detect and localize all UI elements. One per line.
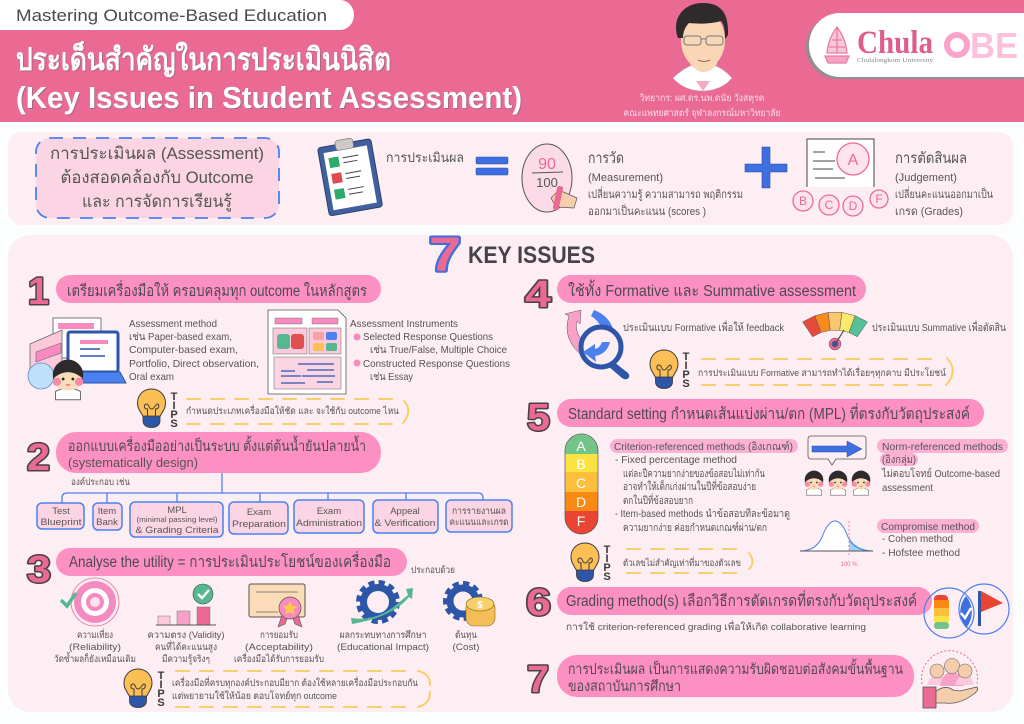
OBE wordmark	[947, 25, 1018, 66]
callout: assessment alignment: ต้องสอดคล้องกับ Outcome	[60, 168, 254, 187]
icon: paper, laptop and student	[28, 318, 126, 400]
text: criterion-referenced methods: - Item-based methods นำข้อสอบทีละข้อมาดู	[615, 507, 790, 520]
text: reliability: ความเที่ยง	[77, 628, 113, 641]
icon: grade card: C	[825, 198, 834, 212]
speaker caption: วิทยากร: ผศ.ดร.นพ.ดนัย วังสตุรค	[639, 93, 764, 104]
number 2: 2	[27, 437, 50, 479]
tips 3: T	[158, 670, 165, 682]
section 2 heading pill	[56, 432, 381, 473]
text: acceptability: (Acceptability)	[245, 642, 313, 653]
text: collaborative learning: การใช้ criterion-referenced grading เพื่อให้เกิด collaborative learning	[566, 620, 866, 633]
tips 3: S	[157, 697, 165, 709]
icon: gear with arrow	[351, 583, 413, 624]
text: assessment method	[129, 318, 259, 383]
icon: clipboard checklist	[317, 135, 383, 216]
tips 5: S	[603, 571, 611, 583]
icon: grade card: D	[849, 199, 858, 213]
text: assessment method: Oral exam	[129, 371, 174, 383]
panel: key issues background	[8, 235, 1013, 712]
icon: grade bar: F	[577, 513, 585, 529]
tips 3: I	[159, 679, 163, 691]
box: exam preparation	[229, 502, 288, 534]
section 1: prepare instruments	[28, 271, 510, 430]
number 6: 6	[526, 582, 551, 624]
icon: bell curve	[800, 521, 873, 568]
text: norm-referenced methods: Norm-referenced methods	[882, 441, 1003, 453]
text: criterion-referenced methods: ความยากง่าย ค่อยกำหนดเกณฑ์ผ่าน/ตก	[623, 521, 767, 534]
box: MPL	[130, 502, 223, 537]
header band	[0, 0, 1024, 122]
icon: exam paper	[268, 310, 346, 394]
icon: grade bar: B	[576, 456, 586, 472]
text: cost: (Cost)	[452, 642, 480, 653]
box: item bank: Item	[98, 506, 116, 517]
text: compromise method: - Cohen method	[882, 533, 953, 545]
box: MPL: MPL	[167, 505, 187, 516]
tips 4: P	[682, 369, 690, 381]
label: consists of: ประกอบด้วย	[411, 565, 455, 576]
box: appeal and verification	[373, 500, 438, 533]
tips 3: P	[157, 688, 165, 700]
text: measurement: ออกมาเป็นคะแนน (scores )	[588, 204, 706, 218]
tips 1: T	[171, 391, 178, 403]
text: validity: ความตรง (Validity)	[148, 630, 224, 641]
icon: grade card	[793, 139, 888, 216]
icon: grade card: B	[799, 194, 807, 208]
section 6 heading pill: Grading method(s) เลือกวิธีการตัดเกรดที่ตรงกับวัตถุประสงค์	[566, 590, 917, 611]
icon: magnifier with cycle arrows	[565, 310, 629, 379]
text: measurement: การวัด	[588, 150, 624, 167]
section 5 heading pill: Standard setting กำหนดเส้นแบ่งผ่าน/ตก (MPL) ที่ตรงกับวัตถุประสงค์	[568, 403, 970, 424]
tips 4	[650, 350, 953, 390]
section 7: social accountability	[527, 651, 978, 708]
series tag pill	[0, 0, 354, 30]
section 4 heading pill	[557, 275, 866, 303]
heading: 7 key issues: 7	[429, 229, 461, 282]
label: components: องค์ประกอบ เช่น	[71, 476, 130, 488]
number 3: 3	[27, 549, 51, 591]
text: formative: ประเมินแบบ Formative เพื่อให้ feedback	[623, 320, 785, 334]
text: educational impact: ผลกระทบทางการศึกษา	[340, 630, 426, 641]
tips 4: การประเมินแบบ Formative สามารถทำได้เรื่อยๆทุกคาบ มีประโยชน์	[698, 366, 946, 379]
heading: 7 key issues	[429, 229, 595, 282]
section 1 heading pill	[56, 275, 381, 303]
text: compromise method: - Hofstee method	[882, 547, 960, 559]
text: cost: ต้นทุน	[455, 630, 477, 641]
callout: assessment alignment	[36, 138, 279, 218]
icon: score paper	[522, 144, 577, 212]
box: exam preparation: Exam	[247, 507, 271, 518]
icon: grade bar	[565, 434, 598, 534]
tips 5: ตัวเลขไม่สำคัญเท่าที่มาของตัวเลข	[623, 556, 741, 569]
icon: grade bar: D	[576, 494, 586, 510]
Chula wordmark: Chula	[857, 25, 933, 61]
section 2 heading pill: (systematically design)	[68, 455, 198, 470]
tips 5: T	[604, 544, 611, 556]
speaker caption	[624, 93, 780, 119]
text: judgement: เกรด (Grades)	[895, 206, 963, 218]
text: assessment method: Portfolio, Direct observation,	[129, 358, 259, 370]
OBE wordmark: BE	[970, 25, 1018, 66]
icon: grade bar: A	[576, 438, 586, 454]
text: measurement: (Measurement)	[588, 172, 663, 184]
text: assessment method: Assessment method	[129, 318, 217, 330]
text: acceptability	[234, 630, 324, 665]
text: compromise method: Compromise method	[881, 521, 975, 533]
icon: grade card: F	[875, 192, 883, 206]
tips 4: T	[683, 351, 690, 363]
text: criterion-referenced methods: แต่ละปีความยากง่ายของข้อสอบไม่เท่ากัน	[623, 467, 765, 480]
callout: assessment alignment: และ การจัดการเรียนรู้	[82, 192, 232, 212]
text: acceptability: การยอมรับ	[260, 630, 298, 641]
box: appeal and verification: & Verification	[374, 518, 436, 529]
tips 1	[138, 389, 408, 430]
text: assessment instruments: Selected Response Questions	[363, 331, 493, 343]
text: norm-referenced methods: ไม่ตอบโจทย์ Outcome-based	[881, 467, 1000, 480]
section 5 heading pill	[557, 399, 984, 427]
box: score and grade report: การรายงานผล	[452, 506, 506, 517]
panel: definition of assessment	[8, 132, 1013, 225]
speaker caption: คณะแพทยศาสตร์ จุฬาลงกรณ์มหาวิทยาลัย	[624, 107, 780, 119]
box: exam administration: Exam	[317, 506, 341, 517]
heading: 7 key issues: KEY ISSUES	[468, 242, 595, 269]
text: judgement: เปลี่ยนคะแนนออกมาเป็น	[895, 186, 993, 201]
section 2 heading pill: ออกแบบเครื่องมืออย่างเป็นระบบ ตั้งแต่ต้นน้ำยันปลายน้ำ	[68, 435, 366, 455]
text: validity: คนที่ได้คะแนนสูง	[155, 640, 217, 653]
tips 5: P	[603, 562, 611, 574]
callout: assessment alignment: การประเมินผล (Assessment)	[50, 144, 264, 163]
number 7: 7	[527, 659, 549, 701]
title	[16, 40, 522, 115]
title: ประเด็นสำคัญในการประเมินนิสิต	[16, 40, 391, 78]
text: validity	[148, 630, 224, 665]
text: criterion-referenced methods: ตกในปีที่ข้อสอบยาก	[623, 493, 693, 507]
text: acceptability: เครื่องมือได้รับการยอมรับ	[234, 652, 324, 665]
text: judgement: การตัดสินผล	[895, 150, 967, 167]
text: norm-referenced methods: assessment	[882, 482, 933, 494]
tree connectors	[62, 473, 483, 503]
logo pill: Chulalongkorn University	[857, 57, 934, 64]
icon: score paper: 100	[536, 175, 558, 190]
text: assessment instruments: Constructed Response Questions	[363, 358, 510, 370]
icon: bar chart with check	[156, 584, 216, 625]
text: assessment method: เช่น Paper-based exam,	[129, 331, 232, 343]
box: score and grade report: คะแนนและเกรด	[450, 517, 508, 528]
tips 5: I	[605, 553, 609, 565]
box: item bank	[93, 503, 122, 530]
box: exam administration: Administration	[296, 518, 362, 529]
text: reliability: วัดซ้ำผลก็ยังเหมือนเดิม	[54, 652, 136, 665]
box: exam administration	[294, 500, 364, 533]
icon: equals sign	[476, 157, 508, 175]
box: item bank: Bank	[96, 517, 118, 528]
section 3: analyse the utility	[27, 548, 495, 709]
text: criterion-referenced methods: อาจทำให้เด็กเก่งผ่านในปีที่ข้อสอบง่าย	[623, 479, 756, 493]
text: norm-referenced methods: (อิงกลุ่ม)	[882, 454, 916, 466]
text: criterion-referenced methods: Criterion-referenced methods (อิงเกณฑ์)	[614, 440, 793, 453]
title: (Key Issues in Student Assessment)	[16, 80, 522, 115]
section 2: systematic design	[27, 432, 512, 537]
text: assessment instruments: เช่น Essay	[370, 371, 414, 383]
text: validity: มีความรู้จริงๆ	[162, 653, 210, 665]
text: assessment instruments: Assessment Instruments	[350, 318, 458, 330]
text: compromise method	[877, 519, 979, 559]
tips 1: I	[172, 400, 176, 412]
section 5: standard setting	[527, 397, 1008, 583]
tips 3: เครื่องมือที่ครบทุกองค์ประกอบมียาก ต้องใช้หลายเครื่องมือประกอบกัน	[172, 676, 418, 689]
number 4: 4	[525, 274, 551, 316]
section 6 heading pill	[557, 587, 932, 615]
section 1 heading pill: เตรียมเครื่องมือให้ ครอบคลุมทุก outcome ในหลักสูตร	[67, 280, 367, 301]
text: judgement	[895, 150, 993, 218]
tips 1: P	[170, 409, 178, 421]
text: assessment method: Computer-based exam,	[129, 344, 238, 356]
number 1: 1	[28, 271, 49, 313]
text: norm-referenced methods	[877, 439, 1008, 494]
section 4 heading pill: ใช้ทั้ง Formative และ Summative assessment	[568, 279, 857, 300]
number 5: 5	[527, 397, 550, 439]
icon: venn of grade and goal	[924, 584, 1009, 638]
tips 3: แต่พยายามใช้ให้น้อย ตอบโจทย์ทุก outcome	[172, 690, 337, 702]
text: reliability	[54, 628, 136, 665]
icon: grade bar: C	[576, 475, 586, 491]
section 7 heading pill	[557, 655, 914, 697]
text: educational impact	[337, 630, 429, 653]
section 3 heading pill	[56, 548, 407, 576]
box: test blueprint	[37, 503, 84, 529]
icon: gauge	[803, 312, 867, 350]
tips 4: I	[684, 360, 688, 372]
tips 4: S	[682, 378, 690, 390]
series tag pill: Mastering Outcome-Based Education	[16, 6, 327, 25]
box: appeal and verification: Appeal	[390, 506, 420, 517]
box: MPL: & Grading Criteria	[136, 525, 219, 536]
icon: speaker portrait	[673, 3, 732, 91]
section 7 heading pill: การประเมินผล เป็นการแสดงความรับผิดชอบต่อสังคมขั้นพื้นฐาน	[568, 658, 903, 678]
text: criterion-referenced methods	[610, 439, 798, 534]
box: test blueprint: Blueprint	[40, 517, 82, 528]
icon: bell curve: 100 %	[840, 562, 858, 568]
section 3 heading pill: Analyse the utility = การประเมินประโยชน์ของเครื่องมือ	[69, 551, 391, 571]
tips 3	[124, 669, 430, 709]
icon: score paper: 90	[538, 156, 556, 173]
icon: students with arrow bubble	[805, 436, 870, 495]
label: assessment: การประเมินผล	[386, 150, 464, 165]
text: assessment instruments: เช่น True/False, Multiple Choice	[370, 344, 507, 356]
icon: target	[61, 578, 119, 626]
icon: university emblem	[825, 27, 849, 63]
icon: grade card: A	[848, 152, 859, 169]
icon: gear with coins	[446, 584, 495, 626]
text: measurement: เปลี่ยนความรู้ ความสามารถ พฤติกรรม	[588, 186, 743, 201]
tips 1: S	[170, 418, 178, 430]
text: assessment instruments	[350, 318, 510, 383]
tips 1: กำหนดประเภทเครื่องมือให้ชัด และ จะใช้กับ outcome ไหน	[186, 404, 399, 417]
box: score and grade report	[446, 500, 512, 532]
text: reliability: (Reliability)	[69, 642, 121, 653]
tips 5	[571, 543, 752, 583]
section 6: grading methods	[526, 582, 1009, 638]
section 7 heading pill: ของสถาบันการศึกษา	[568, 679, 681, 695]
text: criterion-referenced methods: - Fixed percentage method	[615, 454, 737, 466]
section 4: formative and summative	[525, 274, 1006, 390]
icon: plus sign	[745, 147, 787, 188]
icon: certificate	[249, 584, 305, 627]
icon: gear with coins: $	[477, 600, 483, 611]
text: cost	[452, 630, 480, 653]
text: educational impact: (Educational Impact)	[337, 642, 429, 653]
box: test blueprint: Test	[52, 506, 70, 517]
box: exam preparation: Preparation	[232, 519, 286, 530]
logo pill	[806, 13, 1024, 79]
text: judgement: (Judgement)	[895, 172, 957, 184]
box: MPL: (minimal passing level)	[136, 517, 218, 524]
icon: people on hand	[922, 651, 978, 708]
text: measurement	[588, 150, 743, 218]
